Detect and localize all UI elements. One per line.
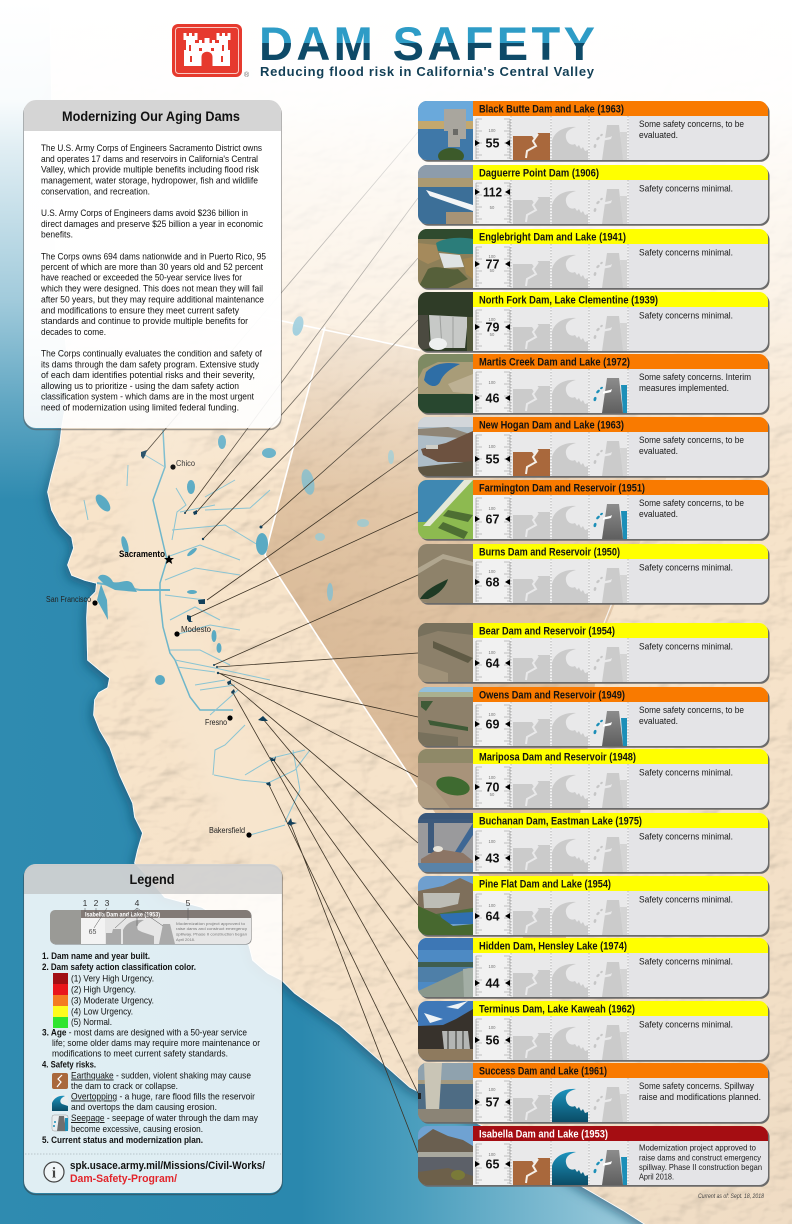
card: Farmington: [418, 480, 770, 541]
title bar: Black Butte Dam and Lake (1963): [479, 104, 624, 116]
risk icons: [511, 559, 628, 603]
icon: info: [44, 1162, 64, 1182]
panel body text: [40, 143, 266, 412]
legend list: safety risks: Overtopping - a huge, rare flood fills the reservoir: [71, 1092, 255, 1102]
card: Daguerre Point: [418, 165, 770, 226]
status text: measures implemented.: [639, 383, 729, 393]
risk icons: [511, 116, 628, 160]
card: Mariposa: [418, 749, 770, 810]
map: state borders: [50, 272, 420, 787]
age gauge: 100: [488, 254, 496, 259]
risk icons: [511, 1016, 628, 1060]
panel body text: and modifications to ensure they meet current safety: [41, 305, 239, 315]
status text: evaluated.: [639, 130, 678, 140]
age gauge: 55: [486, 136, 499, 150]
photo: Englebright: [418, 229, 473, 288]
age gauge: 100: [488, 775, 496, 780]
title bar: Martis Creek Dam and Lake (1972): [479, 356, 630, 368]
risk icons: [511, 638, 628, 682]
age gauge: 100: [488, 317, 496, 322]
card: Hidden: [418, 938, 770, 999]
city: Sacramento: [119, 549, 174, 564]
legend sample card: April 2018.: [176, 937, 195, 942]
panel body text: after 50 years, but they may require additional maintenance: [41, 294, 264, 304]
age gauge: [475, 435, 510, 475]
age gauge: 67: [486, 512, 499, 526]
panel body text: The U.S. Army Corps of Engineers Sacramento District owns: [41, 143, 262, 153]
city: San Francisco: San Francisco: [46, 595, 91, 604]
age gauge: 100: [488, 650, 496, 655]
panel body text: decades to come.: [41, 327, 106, 337]
photo: Success: [418, 1063, 473, 1122]
panel body text: The Corps continually evaluates the condition and safety of: [41, 348, 262, 358]
photo: Black Butte: [418, 101, 473, 164]
risk icons: [511, 702, 628, 746]
risk icons: [511, 244, 628, 288]
title bar: [473, 1001, 768, 1016]
age gauge: 46: [486, 392, 499, 406]
map: dam markers: [141, 450, 297, 826]
legend list: name and classification: (4) Low Urgency.: [71, 1006, 133, 1016]
title bar: [473, 292, 768, 307]
title bar: Owens Dam and Reservoir (1949): [479, 690, 625, 702]
panel body text: The Corps owns 694 dams nationwide and in Puerto Rico, 95: [41, 251, 266, 261]
age gauge: [475, 831, 510, 871]
legend list: safety risks: [42, 1060, 258, 1145]
panel body text: of each dam identifies potential risks and their severity,: [41, 370, 255, 380]
icon: seepage: [52, 1115, 68, 1131]
age gauge: [475, 562, 510, 602]
age gauge: 57: [486, 1096, 499, 1110]
card: Black Butte: [418, 101, 770, 164]
legend sample card: 2: [94, 898, 99, 908]
title bar: Mariposa Dam and Reservoir (1948): [479, 752, 636, 764]
legend sample card: spillway. Phase II construction began: [176, 932, 247, 936]
photo: Isabella: [418, 1126, 473, 1185]
age gauge: [475, 247, 510, 287]
title bar: Hidden Dam, Hensley Lake (1974): [479, 940, 627, 952]
photo: Pine Flat: [418, 876, 473, 935]
title bar: [473, 544, 768, 559]
risk icons: [511, 891, 628, 935]
legend list: safety risks: 4. Safety risks.: [42, 1060, 96, 1070]
legend list: safety risks: Seepage - seepage of water through the dam may: [71, 1113, 258, 1123]
city: Chico: Chico: [176, 459, 196, 468]
status text: evaluated.: [639, 509, 678, 519]
risk icons: [511, 369, 628, 413]
legend list: name and classification: (1) Very High Urgency.: [71, 974, 154, 984]
card: Owens: [418, 687, 770, 748]
status text: Safety concerns minimal.: [639, 642, 733, 652]
age gauge: 100: [488, 839, 496, 844]
legend sample card: 4: [135, 898, 140, 908]
age gauge: 100: [488, 964, 496, 969]
status text: Some safety concerns, to be: [639, 119, 744, 129]
status text: Safety concerns minimal.: [639, 310, 733, 320]
age gauge: [475, 1144, 510, 1184]
legend list: age: 3. Age - most dams are designed with a 50-year service: [42, 1028, 247, 1038]
status text: Some safety concerns. Interim: [639, 372, 751, 382]
status text: Safety concerns minimal.: [639, 562, 733, 572]
status text: Safety concerns minimal.: [639, 1020, 733, 1030]
card: Terminus: [418, 1001, 770, 1062]
title bar: [473, 417, 768, 432]
title bar: Pine Flat Dam and Lake (1954): [479, 878, 611, 890]
city: Sacramento: Sacramento: [119, 549, 166, 559]
status text: Some safety concerns. Spillway: [639, 1081, 754, 1091]
status text: Safety concerns minimal.: [639, 184, 733, 194]
risk icons: [511, 828, 628, 872]
title bar: [473, 1126, 768, 1141]
legend sample card: 1: [83, 898, 88, 908]
status text: [639, 498, 744, 519]
card: Martis Creek: [418, 354, 770, 415]
status text: Safety concerns minimal.: [639, 248, 733, 258]
age gauge: 68: [486, 576, 499, 590]
photo: Hidden: [418, 938, 473, 997]
panel body text: percent of which are more than 30 years old and 52 percent: [41, 262, 263, 272]
legend heading: Legend: [130, 871, 174, 887]
city: Modesto: Modesto: [181, 625, 212, 634]
card: Success: [418, 1063, 770, 1124]
legend list: safety risks: the dam to crack or collapse.: [71, 1081, 178, 1091]
website link: spk.usace.army.mil/Missions/Civil-Works/: [70, 1160, 265, 1172]
title bar: Burns Dam and Reservoir (1950): [479, 546, 620, 558]
status text: evaluated.: [639, 446, 678, 456]
title bar: Farmington Dam and Reservoir (1951): [479, 482, 645, 494]
title bar: [473, 480, 768, 495]
status text: raise and modifications planned.: [639, 1092, 761, 1102]
card: Isabella: [418, 1126, 770, 1187]
title bar: New Hogan Dam and Lake (1963): [479, 420, 624, 432]
panel body text: which they were designed. This does not mean they will fail: [40, 284, 263, 294]
panel body text: and operates 17 dams and reservoirs in California's Central: [41, 154, 258, 164]
legend sample card: 65: [89, 929, 96, 936]
age gauge: 43: [486, 852, 499, 866]
status text: Some safety concerns, to be: [639, 435, 744, 445]
legend sample card: Isabella Dam and Lake (1953): [85, 912, 160, 918]
title bar: Englebright Dam and Lake (1941): [479, 232, 626, 244]
status text: [639, 705, 744, 726]
legend list: safety risks: Earthquake - sudden, violent shaking may cause: [71, 1070, 251, 1080]
card: Burns: [418, 544, 770, 605]
status text: [639, 372, 751, 393]
age gauge: [475, 1081, 510, 1121]
age gauge: 100: [488, 712, 496, 717]
legend list: name and classification: 1. Dam name and year built.: [42, 951, 150, 961]
age gauge: [475, 894, 510, 934]
status text: [639, 119, 744, 140]
risk icons: [511, 307, 628, 351]
age gauge: 50: [490, 332, 495, 337]
legend list: age: [42, 1028, 260, 1058]
title bar: Bear Dam and Reservoir (1954): [479, 626, 615, 638]
icon: earthquake: [52, 1073, 68, 1089]
age gauge: 100: [488, 1025, 496, 1030]
legend list: safety risks: and overtops the dam causing erosion.: [71, 1102, 217, 1112]
age gauge: 100: [488, 1152, 496, 1157]
panel body text: allowing us to prioritize - using the dam safety action: [41, 381, 239, 391]
title bar: [473, 876, 768, 891]
title: DAM SAFETY: [259, 17, 595, 70]
age gauge: 65: [486, 1158, 499, 1172]
age gauge: 79: [486, 320, 499, 334]
legend list: name and classification: [42, 951, 196, 1028]
city: Bakersfield: Bakersfield: [209, 826, 245, 835]
title bar: [473, 354, 768, 369]
panel body text: need of modernization using limited federal funding.: [41, 402, 239, 412]
legend sample card: 5: [186, 898, 191, 908]
age gauge: 112: [483, 186, 502, 200]
title bar: [473, 623, 768, 638]
panel body text: conservation, and recreation.: [41, 186, 150, 196]
card: Pine Flat: [418, 876, 770, 937]
icon: info: i: [52, 1166, 56, 1182]
risk icons: [511, 1078, 628, 1122]
legend list: age: life; some older dams may require more maintenance or: [52, 1038, 260, 1048]
photo: Owens: [418, 687, 473, 746]
risk icons: [511, 1141, 628, 1185]
legend list: name and classification: (3) Moderate Urgency.: [71, 996, 154, 1006]
panel body text: benefits.: [41, 230, 73, 240]
age gauge: 50: [490, 792, 495, 797]
panel body text: Valley, which provide multiple benefits including flood risk: [41, 165, 259, 175]
status text: [639, 1081, 761, 1102]
card: Englebright: [418, 229, 770, 290]
risk icons: [511, 495, 628, 539]
title bar: Daguerre Point Dam (1906): [479, 168, 599, 180]
legend sample card: 3: [105, 898, 110, 908]
photo: Buchanan: [418, 813, 473, 872]
photo: Burns: [418, 544, 473, 603]
legend list: age: modifications to meet current safety standards.: [52, 1048, 228, 1058]
panel body text: classification system - which dams are in the most urgent: [41, 392, 254, 402]
age gauge: [475, 310, 510, 350]
status text: Safety concerns minimal.: [639, 768, 733, 778]
status text: April 2018.: [639, 1172, 674, 1182]
photo: Martis Creek: [418, 354, 473, 413]
photo: Bear: [418, 623, 473, 682]
panel body text: direct damages and preserve $25 billion a year in economic: [41, 219, 263, 229]
risk icons: [511, 953, 628, 997]
legend list: safety risks: 5. Current status and modernization plan.: [42, 1135, 203, 1145]
city: Fresno: Fresno: [205, 718, 227, 727]
status text: Some safety concerns, to be: [639, 498, 744, 508]
icon: overtopping: [52, 1095, 68, 1111]
age gauge: [475, 183, 510, 223]
age gauge: [475, 705, 510, 745]
title bar: [473, 749, 768, 764]
subtitle: Reducing flood risk in California's Central Valley: [260, 64, 595, 79]
registered mark: ®: [244, 71, 250, 79]
website link: Dam-Safety-Program/: [70, 1173, 177, 1185]
legend sample card: [50, 898, 252, 944]
card: North Fork: [418, 292, 770, 353]
age gauge: 100: [488, 1087, 496, 1092]
age gauge: 77: [486, 258, 499, 272]
map: rivers and lakes: [84, 430, 310, 835]
card: Bear: [418, 623, 770, 684]
top fade over map: [0, 0, 792, 500]
age gauge: [475, 498, 510, 538]
age gauge: 100: [488, 569, 496, 574]
age gauge: 56: [486, 1034, 499, 1048]
age gauge: [475, 956, 510, 996]
age gauge: 100: [488, 128, 496, 133]
status text: spillway. Phase II construction began: [639, 1162, 762, 1172]
photo: Farmington: [418, 480, 473, 539]
map: leader lines from dams to cards: [145, 132, 418, 1153]
age gauge: 69: [486, 718, 499, 732]
city: Chico: [170, 459, 196, 470]
photo: North Fork: [418, 292, 473, 351]
panel heading: Modernizing Our Aging Dams: [62, 109, 240, 124]
age gauge: 64: [486, 910, 499, 924]
age gauge: 50: [490, 268, 495, 273]
title bar: [473, 165, 768, 180]
panel body text: U.S. Army Corps of Engineers dams avoid $236 billion in: [41, 208, 248, 218]
age gauge: 70: [486, 780, 499, 794]
status text: Safety concerns minimal.: [639, 894, 733, 904]
title bar: Buchanan Dam, Eastman Lake (1975): [479, 816, 642, 828]
age gauge: 50: [490, 205, 495, 210]
risk icons: [511, 180, 628, 224]
panel: Modernizing Our Aging Dams: [24, 100, 281, 430]
age gauge: 100: [488, 380, 496, 385]
risk icons: [511, 764, 628, 808]
logo: Corps of Engineers castle: [172, 24, 242, 77]
risk icons: [511, 432, 628, 476]
age gauge: 100: [488, 506, 496, 511]
panel: Legend: [24, 864, 282, 1194]
panel body text: its dams through the dam safety program. Extensive study: [41, 359, 259, 369]
status text: Safety concerns minimal.: [639, 956, 733, 966]
website link: [70, 1160, 265, 1185]
status text: Modernization project approved to: [639, 1143, 756, 1153]
age gauge: [475, 119, 510, 159]
title bar: Success Dam and Lake (1961): [479, 1066, 607, 1078]
status text: Some safety concerns, to be: [639, 705, 744, 715]
title bar: Terminus Dam, Lake Kaweah (1962): [479, 1004, 635, 1016]
age gauge: 64: [486, 656, 499, 670]
status text: Safety concerns minimal.: [639, 832, 733, 842]
title bar: North Fork Dam, Lake Clementine (1939): [479, 294, 658, 306]
card: New Hogan: [418, 417, 770, 478]
legend sample card: Modernization project approved to: [176, 921, 246, 926]
panel body text: have reached or exceeded the 50-year service lives for: [41, 273, 242, 283]
photo: Terminus: [418, 1001, 473, 1060]
status text: [639, 435, 744, 456]
title bar: [473, 1063, 768, 1078]
title bar: [473, 813, 768, 828]
city: Modesto: [174, 625, 212, 637]
map: cities: [46, 459, 252, 838]
age gauge: [475, 641, 510, 681]
legend list: safety risks: become excessive, causing erosion.: [71, 1124, 203, 1134]
card: Buchanan: [418, 813, 770, 874]
age gauge: 100: [488, 903, 496, 908]
age gauge: 100: [488, 444, 496, 449]
title bar: [473, 687, 768, 702]
panel body text: management, water storage, hydropower, fish and wildlife: [41, 176, 258, 186]
age gauge: 55: [486, 452, 499, 466]
title bar: [473, 938, 768, 953]
legend list: name and classification: 2. Dam safety action classification color.: [42, 962, 196, 972]
age gauge: [475, 372, 510, 412]
status text: [639, 1143, 762, 1182]
legend sample card: raise dams and construct emergency: [176, 926, 247, 931]
age gauge: [475, 767, 510, 807]
legend list: name and classification: (5) Normal.: [71, 1017, 112, 1027]
age gauge: [475, 1019, 510, 1059]
status text: raise dams and construct emergency: [639, 1152, 762, 1162]
age gauge: 44: [486, 976, 499, 990]
date note: Current as of: Sept. 18, 2018: [698, 1194, 765, 1200]
photo: Daguerre Point: [418, 165, 473, 224]
status text: evaluated.: [639, 716, 678, 726]
photo: Mariposa: [418, 749, 473, 808]
photo: New Hogan: [418, 417, 473, 476]
title bar: [473, 101, 768, 116]
legend list: name and classification: (2) High Urgency.: [71, 984, 136, 994]
panel body text: standards and continue to provide multiple benefits for: [41, 316, 248, 326]
title bar: [473, 229, 768, 244]
title bar: Isabella Dam and Lake (1953): [479, 1128, 608, 1140]
